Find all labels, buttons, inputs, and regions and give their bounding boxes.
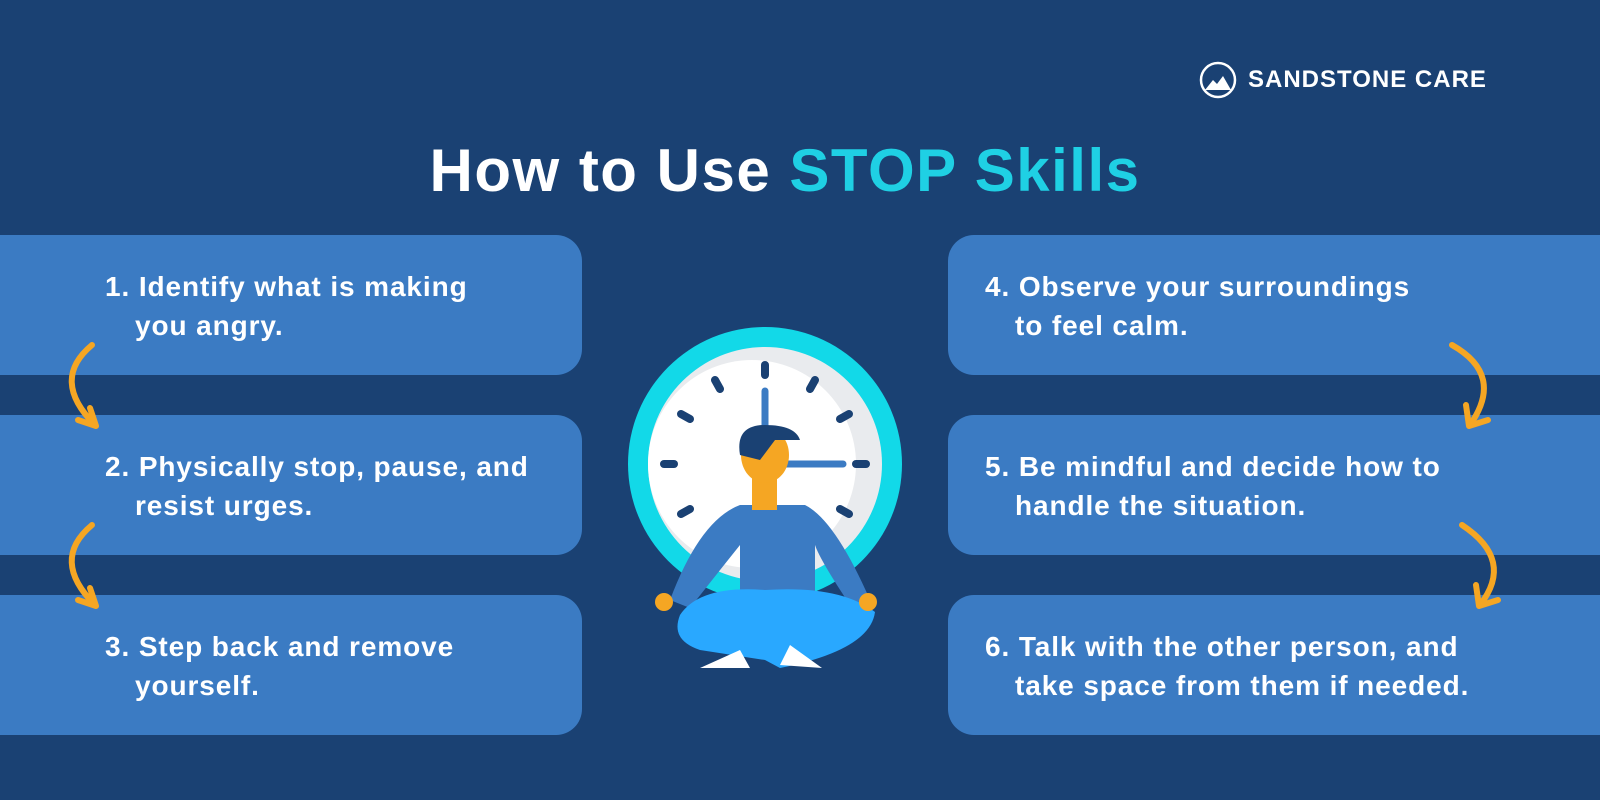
- illustration: clock and person: [628, 327, 902, 668]
- panel: step 3: [0, 595, 582, 735]
- logo: SANDSTONE CARE: [1248, 66, 1487, 93]
- panel: step 3: yourself.: [135, 670, 260, 701]
- panel: step 2: [0, 415, 582, 555]
- panel: step 1: 1. Identify what is making: [105, 271, 468, 302]
- panel: step 5: 5. Be mindful and decide how to: [985, 451, 1441, 482]
- panel: step 6: [948, 595, 1600, 735]
- panel: step 1: you angry.: [135, 310, 284, 341]
- panel: step 3: 3. Step back and remove: [105, 631, 454, 662]
- logo: [1200, 62, 1487, 98]
- panel: step 6: 6. Talk with the other person, and: [985, 631, 1458, 662]
- panel: step 5: handle the situation.: [1015, 490, 1306, 521]
- panel: step 4: [948, 235, 1600, 375]
- panel: step 2: resist urges.: [135, 490, 313, 521]
- panel: step 5: [948, 415, 1600, 555]
- panel: step 4: to feel calm.: [1015, 310, 1189, 341]
- panel: step 2: 2. Physically stop, pause, and: [105, 451, 529, 482]
- title: How to Use STOP Skills: [430, 137, 1140, 204]
- panel: step 6: take space from them if needed.: [1015, 670, 1469, 701]
- panel: step 4: 4. Observe your surroundings: [985, 271, 1410, 302]
- panel: step 1: [0, 235, 582, 375]
